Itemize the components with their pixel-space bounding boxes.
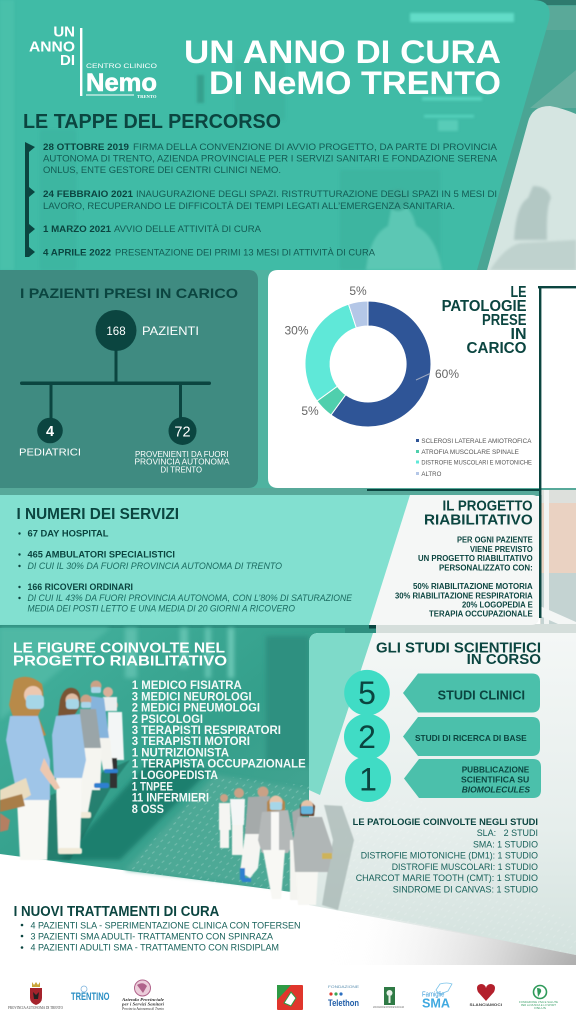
- heading: pazienti: I PAZIENTI PRESI IN CARICO: [20, 285, 238, 301]
- heading: gli studi scientifici: GLI STUDI SCIENTIFICI: [376, 641, 541, 657]
- list: numeri: DI CUI IL 30% DA FUORI PROVINCIA AUTONOMA DI TRENTO: [28, 561, 283, 572]
- milestone: 1 marzo 2021: [43, 224, 262, 234]
- panel: le patologie prese in carico: [268, 270, 576, 488]
- photo: staff group on the left: [0, 677, 130, 860]
- logo: Fondazione sport e salute: [519, 986, 558, 1010]
- milestone: 24 febbraio 2021: [43, 189, 497, 211]
- list: figure professionali: 3 MEDICI NEUROLOGI: [132, 691, 252, 703]
- milestone: 24 febbraio 2021: 24 FEBBRAIO 2021: [43, 189, 133, 199]
- heading: le patologie: [442, 284, 527, 357]
- study row: 2 studi di ricerca di base: [344, 714, 540, 760]
- study row: 5 studi clinici: [344, 670, 540, 716]
- logo: red and green emblem: [277, 985, 303, 1010]
- list: numeri: [28, 529, 353, 615]
- panel: il progetto riabilitativo: [365, 495, 541, 625]
- study row: 5 studi clinici: 5: [358, 675, 376, 711]
- milestone: 1 marzo 2021: AVVIO DELLE ATTIVITÀ DI CURA: [114, 224, 262, 234]
- donut chart: [305, 301, 431, 427]
- heading: trattamenti: I NUOVI TRATTAMENTI DI CURA: [14, 904, 220, 920]
- text: le patologie coinvolte negli studi: DISTROFIE MIOTONICHE (DM1): 1 STUDIO: [361, 851, 538, 862]
- title: [184, 34, 501, 101]
- list: trattamenti: 4 PAZIENTI SLA - SPERIMENTAZIONE CLINICA CON TOFERSEN: [30, 920, 301, 931]
- list: figure professionali: 11 INFERMIERI: [132, 793, 209, 805]
- bullet dots: [18, 532, 21, 599]
- logo: Fondazione sport e salute: ONLUS: [534, 1007, 546, 1010]
- node: 72 provenienti da fuori provincia: 72: [174, 424, 191, 440]
- text: le patologie coinvolte negli studi: SLA: 2 STUDI: [477, 828, 538, 839]
- panel: top header: [0, 0, 550, 270]
- text: le patologie coinvolte negli studi: CHARCOT MARIE TOOTH (CMT): 1 STUDIO: [356, 873, 538, 884]
- list: figure professionali: 1 MEDICO FISIATRA: [132, 680, 242, 692]
- node: 168 pazienti: [96, 310, 199, 351]
- milestone: 28 ottobre 2019: 28 OTTOBRE 2019: [43, 142, 129, 152]
- logo: Famiglie SMA: Famiglie: [422, 992, 445, 999]
- list: figure professionali: 1 TERAPISTA OCCUPAZIONALE: [132, 759, 306, 771]
- logo: Azienda provinciale per i servizi sanitari: Provincia Autonoma di Trento: [121, 1006, 164, 1011]
- logo: un anno di Centro Clinico NeMO Trento: ANNO: [29, 39, 75, 56]
- logo: Provincia autonoma di Trento: PROVINCIA AUTONOMA DI TRENTO: [8, 1005, 63, 1010]
- section: i nuovi trattamenti di cura: [14, 904, 301, 954]
- logo: Azienda provinciale per i servizi sanitari: per i Servizi Sanitari: [121, 1002, 165, 1006]
- study row: 1 pubblicazione scientifica: SCIENTIFICA SU: [461, 775, 529, 785]
- heading: le patologie: IN: [510, 326, 526, 343]
- panel: i numeri dei servizi: [0, 495, 410, 625]
- text: percentuali riabilitazione: [395, 536, 533, 619]
- logo: Famiglie SMA: SMA: [422, 996, 451, 1010]
- list: figure professionali: 2 MEDICI PNEUMOLOGI: [132, 703, 260, 715]
- logo: Famiglie SMA: [422, 983, 452, 1010]
- text: percentuali riabilitazione: UN PROGETTO RIABILITATIVO: [418, 554, 533, 563]
- logo: Fondazione sport e salute: FONDAZIONE VIVA E SALUTE: [519, 1001, 558, 1004]
- logo: un anno di Centro Clinico NeMO Trento: Nemo: [86, 69, 157, 97]
- list: numeri: MEDIA DEI POSTI LETTO E UNA MEDIA DI 20 GIORNI A RICOVERO: [28, 604, 296, 615]
- logo: un anno di Centro Clinico NeMO Trento: [29, 24, 157, 99]
- text: percentuali riabilitazione: 30% RIABILITAZIONE RESPIRATORIA: [395, 591, 533, 600]
- heading: gli studi scientifici: [376, 641, 541, 668]
- text: percentuali riabilitazione: 20% LOGOPEDIA E: [462, 600, 533, 609]
- title: UN ANNO DI CURA: [184, 34, 501, 70]
- milestone: 28 ottobre 2019: FIRMA DELLA CONVENZIONE DI AVVIO PROGETTO, DA PARTE DI PROVINCIA: [133, 142, 498, 152]
- title: DI NeMO TRENTO: [209, 65, 501, 101]
- logo: Trentino: TRENTINO: [71, 991, 110, 1003]
- logo: green association emblem: [373, 987, 404, 1009]
- list: trattamenti: 3 PAZIENTI SMA ADULTI- TRATTAMENTO CON SPINRAZA: [30, 931, 274, 942]
- milestone: 28 ottobre 2019: [43, 142, 498, 175]
- study row: 2 studi di ricerca di base: STUDI DI RICERCA DI BASE: [415, 733, 527, 743]
- logo: Slanciamoci: [470, 984, 502, 1007]
- logo: Provincia autonoma di Trento: [8, 982, 63, 1010]
- study row: 2 studi di ricerca di base: 2: [358, 719, 376, 755]
- panel: le figure coinvolte background: [0, 628, 345, 899]
- milestone: 1 marzo 2021: 1 MARZO 2021: [43, 224, 111, 234]
- logo: Slanciamoci: SLANCIAMOCI: [470, 1002, 502, 1007]
- panel: light image on the right: [487, 106, 576, 270]
- list: figure professionali: 1 NUTRIZIONISTA: [132, 747, 229, 759]
- logo: Azienda provinciale per i servizi sanitari: Azienda Provinciale: [121, 997, 164, 1002]
- list: figure professionali: 3 TERAPISTI MOTORI: [132, 736, 250, 748]
- study row: 1 pubblicazione scientifica: BIOMOLECULES: [462, 785, 530, 795]
- list: figure professionali: 2 PSICOLOGI: [132, 714, 203, 726]
- heading: le patologie: PATOLOGIE: [442, 298, 527, 315]
- node: 4 pediatrici: [19, 418, 81, 459]
- heading: gli studi scientifici: IN CORSO: [467, 652, 541, 668]
- node: 168 pazienti: PAZIENTI: [142, 324, 199, 338]
- text: le patologie coinvolte negli studi: [353, 817, 538, 895]
- logo: Fondazione sport e salute: PER LA MUSICA E LO SPORT: [521, 1004, 556, 1007]
- logo: Fondazione Telethon: FONDAZIONE: [328, 985, 360, 989]
- heading: le figure coinvolte: [13, 640, 227, 670]
- list: figure professionali: 1 TNPEE: [132, 781, 173, 793]
- text: le patologie coinvolte negli studi: LE PATOLOGIE COINVOLTE NEGLI STUDI: [353, 817, 538, 827]
- heading: le figure coinvolte: LE FIGURE COINVOLTE NEL: [13, 640, 225, 656]
- panel: i pazienti presi in carico: [0, 270, 258, 488]
- logo: un anno di Centro Clinico NeMO Trento: DI: [60, 52, 75, 69]
- panel: gli studi scientifici background: [309, 633, 576, 955]
- timeline: le tappe: [25, 142, 498, 258]
- study row: 1 pubblicazione scientifica: PUBBLICAZIONE: [462, 765, 530, 775]
- node: 4 pediatrici: PEDIATRICI: [19, 447, 81, 459]
- list: figure professionali: 1 LOGOPEDISTA: [132, 770, 218, 782]
- tree connector lines: [20, 345, 211, 420]
- list: numeri: 465 AMBULATORI SPECIALISTICI: [28, 550, 175, 561]
- chart legend: ALTRO: [421, 471, 441, 478]
- milestone: 24 febbraio 2021: LAVORO, RECUPERANDO LE DIFFICOLTÀ DEI TEMPI LEGATI ALL’EMERGENZA SANITARIA.: [43, 201, 455, 211]
- study row: 1 pubblicazione scientifica: [345, 756, 541, 802]
- node: 72 provenienti da fuori provincia: PROVENIENTI DA FUORI: [135, 450, 228, 459]
- node: 4 pediatrici: 4: [46, 424, 54, 440]
- heading: progetto: IL PROGETTO: [442, 499, 532, 515]
- text: le patologie coinvolte negli studi: DISTROFIE MUSCOLARI: 1 STUDIO: [392, 862, 538, 873]
- list: numeri: 166 RICOVERI ORDINARI: [28, 582, 133, 593]
- heading: le patologie: LE: [510, 284, 526, 301]
- text: percentuali riabilitazione: PERSONALIZZATO CON:: [439, 563, 533, 572]
- lower white band shading: [246, 890, 576, 965]
- donut value labels: 30%: [284, 324, 309, 338]
- list: trattamenti: [21, 920, 301, 954]
- node: 72 provenienti da fuori provincia: [134, 417, 230, 474]
- milestone: 4 aprile 2022: 4 APRILE 2022: [43, 248, 111, 258]
- heading: le figure coinvolte: PROGETTO RIABILITATIVO: [13, 654, 227, 670]
- node: 72 provenienti da fuori provincia: DI TRENTO: [160, 466, 202, 474]
- milestone: 28 ottobre 2019: AUTONOMA DI TRENTO, AZIENDA PROVINCIALE PER I SERVIZI SANITARI E FONDAZIONE SERENA: [43, 154, 498, 164]
- text: percentuali riabilitazione: PER OGNI PAZIENTE: [457, 536, 533, 545]
- logo: Fondazione Telethon: Telethon: [328, 998, 359, 1009]
- donut value labels: 5%: [301, 404, 319, 418]
- logo: Fondazione Telethon: [328, 985, 360, 1009]
- node: 72 provenienti da fuori provincia: PROVINCIA AUTONOMA: [134, 458, 230, 466]
- photo: staff group on the right: [219, 786, 354, 910]
- list: figure professionali: [132, 680, 306, 816]
- list: figure professionali: 8 OSS: [132, 804, 164, 816]
- text: percentuali riabilitazione: TERAPIA OCCUPAZIONALE: [429, 610, 533, 619]
- list: numeri: DI CUI IL 43% DA FUORI PROVINCIA AUTONOMA, CON L’80% DI SATURAZIONE: [28, 593, 353, 604]
- list: numeri: 67 DAY HOSPITAL: [28, 529, 109, 540]
- study row: 5 studi clinici: STUDI CLINICI: [438, 688, 525, 702]
- list: figure professionali: 3 TERAPISTI RESPIRATORI: [132, 725, 281, 737]
- logo: un anno di Centro Clinico NeMO Trento: UN: [53, 24, 75, 41]
- heading: le tappe del percorso: LE TAPPE DEL PERCORSO: [23, 111, 281, 133]
- text: le patologie coinvolte negli studi: SINDROME DI CANVAS: 1 STUDIO: [393, 884, 538, 895]
- logo: un anno di Centro Clinico NeMO Trento: CENTRO CLINICO: [86, 63, 157, 70]
- chart legend: SCLEROSI LATERALE AMIOTROFICA: [421, 438, 532, 445]
- text: percentuali riabilitazione: 50% RIABILITAZIONE MOTORIA: [413, 582, 533, 591]
- node: 168 pazienti: 168: [106, 326, 126, 338]
- chart legend: [416, 438, 532, 478]
- donut value labels: [284, 284, 459, 418]
- logo: Trentino: [71, 986, 110, 1003]
- milestone: 4 aprile 2022: PRESENTAZIONE DEI PRIMI 13 MESI DI ATTIVITÀ DI CURA: [115, 248, 376, 258]
- list: trattamenti: 4 PAZIENTI ADULTI SMA - TRATTAMENTO CON RISDIPLAM: [30, 943, 279, 954]
- donut value labels: 60%: [435, 367, 459, 381]
- heading: progetto: [424, 499, 533, 528]
- logo: green association emblem: ASSOCIAZIONE DISTROFIE MUSCOLARI: [373, 1005, 404, 1009]
- text: percentuali riabilitazione: VIENE PREVISTO: [470, 545, 533, 554]
- logo: Azienda provinciale per i servizi sanitari: [121, 980, 165, 1011]
- chart legend: DISTROFIE MUSCOLARI E MIOTONICHE: [421, 460, 532, 466]
- donut value labels: 5%: [349, 284, 367, 298]
- logo: un anno di Centro Clinico NeMO Trento: TRENTO: [137, 94, 157, 99]
- milestone: 24 febbraio 2021: INAUGURAZIONE DEGLI SPAZI. RISTRUTTURAZIONE DEGLI SPAZI IN 5 MESI DI: [136, 189, 497, 199]
- heading: le patologie: CARICO: [466, 340, 526, 357]
- chart legend: ATROFIA MUSCOLARE SPINALE: [421, 449, 519, 456]
- text: le patologie coinvolte negli studi: SMA: 1 STUDIO: [473, 839, 538, 850]
- heading: servizi: I NUMERI DEI SERVIZI: [16, 506, 179, 523]
- bracket lines around the right column: [367, 286, 576, 628]
- milestone: 28 ottobre 2019: ONLUS, ENTE GESTORE DEI CENTRI CLINICI NEMO.: [43, 165, 281, 175]
- study row: 1 pubblicazione scientifica: 1: [359, 762, 377, 798]
- heading: le patologie: PRESE: [482, 312, 526, 329]
- timeline marker bar: [25, 142, 35, 257]
- heading: progetto: RIABILITATIVO: [424, 512, 533, 528]
